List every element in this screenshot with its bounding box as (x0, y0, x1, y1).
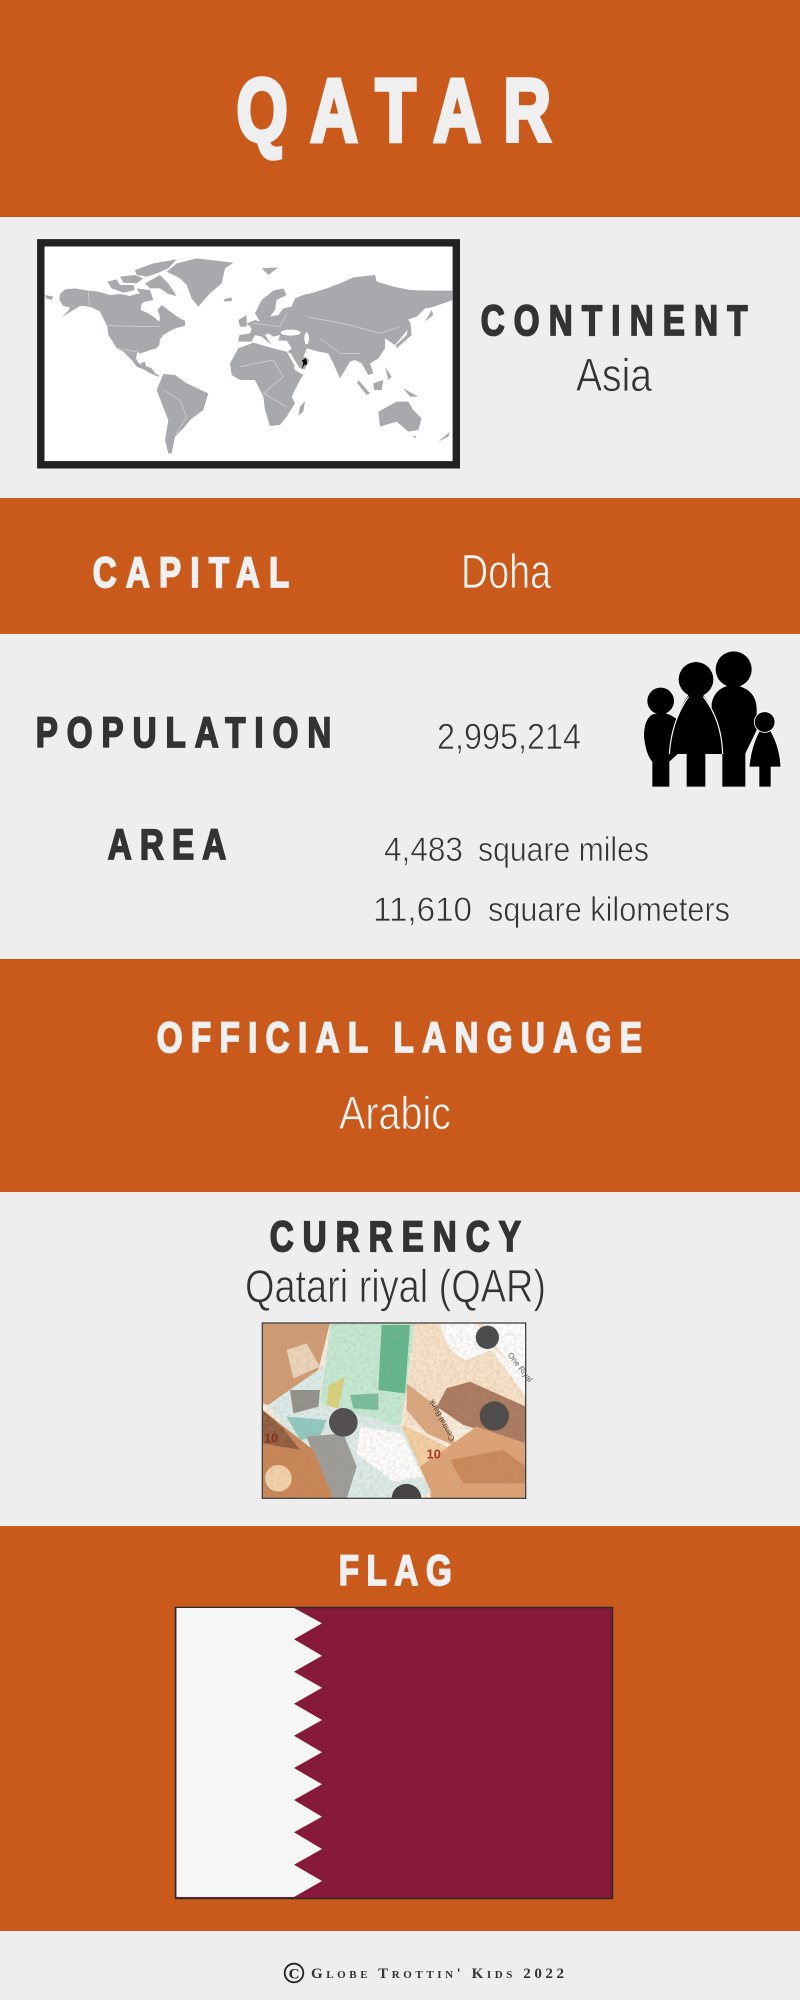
world map (41, 243, 456, 465)
icon: family (644, 651, 781, 787)
language value: Arabic (339, 1087, 451, 1139)
language label: OFFICIAL LANGUAGE (157, 1015, 642, 1062)
panel: official language (0, 959, 800, 1192)
panel: flag (0, 1526, 800, 1931)
credit text: Globe Trottin' Kids 2022 (311, 1966, 564, 1982)
area in square miles: square miles (478, 831, 649, 869)
currency value: Qatari riyal (QAR) (245, 1260, 546, 1312)
panel: title banner (0, 0, 800, 217)
panel: footer (0, 1931, 800, 2000)
continent value: Asia (576, 349, 652, 401)
banknotes and coins picture: 10 (264, 1432, 278, 1446)
panel: population and area (0, 634, 800, 959)
icon: Qatar location marker (302, 358, 307, 370)
banknotes and coins picture: 10 (427, 1447, 441, 1461)
flag of Qatar (176, 1608, 612, 1898)
icon: copyright symbol: C (289, 1966, 299, 1982)
panel: currency (0, 1192, 800, 1526)
icon: copyright symbol (285, 1964, 303, 1982)
population value: 2,995,214 (437, 716, 581, 757)
continent label: CONTINENT (481, 298, 747, 345)
area in square miles: 4,483 (384, 831, 463, 869)
area in square miles (384, 831, 649, 869)
flag label: FLAG (339, 1548, 452, 1595)
title: QATAR (236, 60, 551, 160)
population label: POPULATION (36, 710, 331, 757)
banknotes and coins picture: One Riyal (506, 1351, 535, 1384)
currency label: CURRENCY (270, 1214, 521, 1261)
capital value: Doha (461, 546, 551, 599)
area label: AREA (108, 822, 226, 869)
banknotes and coins picture (262, 1323, 535, 1499)
capital label: CAPITAL (93, 550, 289, 597)
panel: continent (0, 217, 800, 498)
banknotes and coins picture: Central Bank (427, 1398, 457, 1443)
area in square kilometers (373, 891, 730, 929)
panel: capital (0, 498, 800, 634)
area in square kilometers: square kilometers (488, 891, 730, 929)
area in square kilometers: 11,610 (373, 891, 472, 929)
